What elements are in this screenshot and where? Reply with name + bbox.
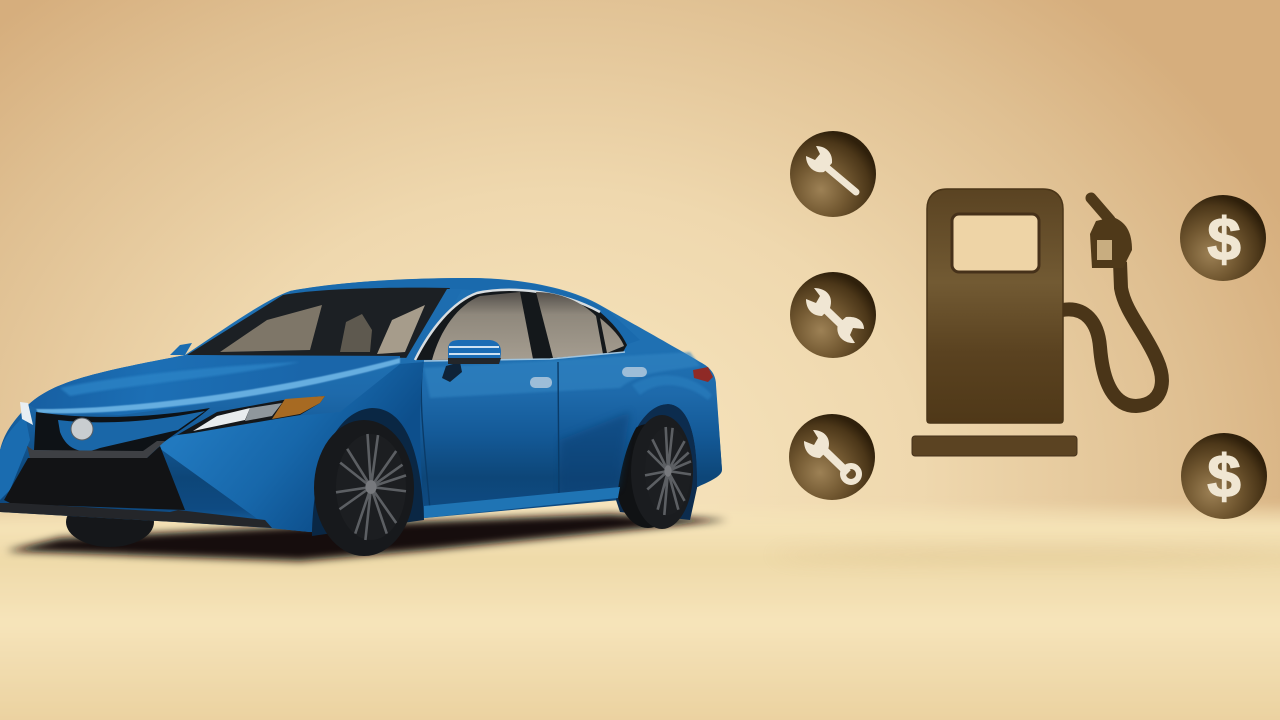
hood highlight (36, 358, 400, 413)
rear wheel (615, 404, 697, 529)
front lip (0, 503, 272, 528)
headlight (177, 396, 325, 435)
ground shadow under car (6, 514, 728, 561)
hood (28, 355, 400, 415)
side sill highlight (424, 487, 620, 518)
icon: dollar coin lower (1181, 433, 1267, 519)
side mirror (442, 340, 501, 382)
pump base (912, 436, 1077, 456)
icon: dollar coin lower: $ (1207, 443, 1241, 510)
pump hose (1062, 262, 1162, 406)
roof (290, 278, 640, 345)
icon: wrench coin top (790, 131, 876, 217)
icon: ring wrench coin bottom (789, 414, 875, 500)
door upper highlight (424, 352, 700, 398)
door handles (530, 367, 647, 388)
lower grille mesh (4, 446, 185, 510)
front fender (155, 362, 424, 532)
emblem (71, 418, 93, 440)
pump display (952, 214, 1039, 272)
windshield (187, 288, 450, 358)
hood crease (60, 362, 300, 396)
rear shoulder highlight (632, 375, 712, 400)
far headlight (20, 402, 33, 425)
icon: dollar coin upper: $ (1207, 206, 1241, 273)
pump nozzle (1090, 198, 1132, 268)
rear quarter and trunk (560, 362, 722, 496)
side windows with chrome trim (415, 290, 627, 361)
front wheel (314, 420, 414, 556)
car: blue sedan (0, 278, 728, 561)
far front wheel (66, 497, 154, 547)
icon: dollar coin upper (1180, 195, 1266, 281)
pump body (927, 189, 1063, 423)
A pillar (405, 289, 462, 360)
door shadow sweep (560, 412, 630, 496)
icon: double wrench coin middle (790, 272, 876, 358)
chrome grille surround (27, 441, 165, 458)
door seams (421, 362, 559, 510)
front upper grille and nose (34, 408, 210, 453)
front wheel arch (312, 408, 424, 536)
far fender (0, 415, 30, 500)
far side mirror (170, 343, 192, 355)
car body (0, 278, 722, 532)
icon: fuel pump (912, 189, 1162, 456)
tail light (693, 367, 713, 382)
